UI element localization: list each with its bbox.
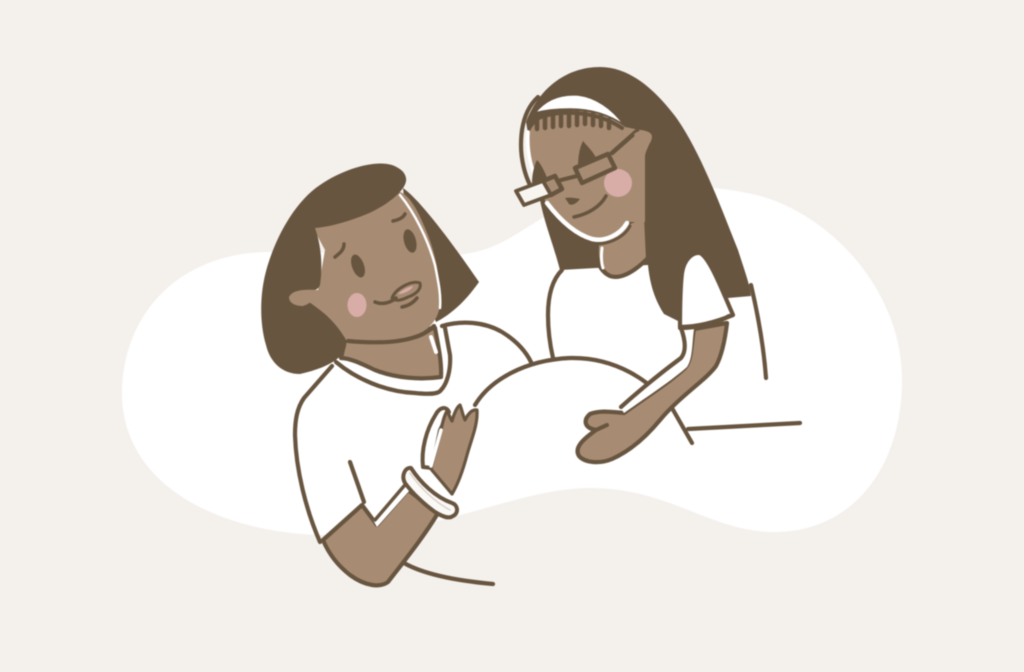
left arm sleeve white: [373, 485, 410, 527]
left arm upper line: [375, 486, 404, 520]
sleeve crease: [350, 462, 364, 502]
right woman chin highlight: [547, 203, 627, 240]
face highlight: [400, 195, 440, 308]
right woman back line: [751, 285, 766, 378]
arm cuff: [680, 316, 729, 328]
right woman cheek: [604, 169, 632, 197]
thumb split: [596, 425, 607, 430]
left woman mouth: [392, 282, 420, 300]
hand left edge highlight: [431, 430, 441, 466]
left woman front hair: [261, 164, 406, 374]
left woman back hair: [403, 188, 479, 322]
right woman neck: [597, 215, 648, 277]
left woman: [261, 164, 531, 585]
right woman face rim: [528, 132, 536, 178]
right woman arm: [578, 316, 729, 462]
left woman cheek: [348, 293, 366, 317]
white blob: [122, 187, 902, 535]
right woman face: [528, 111, 651, 239]
left hand outline: [423, 408, 449, 468]
left woman eyes: [348, 253, 368, 279]
right woman smile: [574, 196, 606, 217]
left woman eyebrows: [335, 214, 405, 257]
jaw line: [348, 326, 434, 342]
left lens frame: [543, 176, 562, 195]
arm skin: [578, 323, 727, 462]
headband: [535, 95, 624, 125]
smile lines: [375, 298, 417, 307]
left woman shirt shoulder: [442, 323, 531, 362]
right woman lap line: [688, 423, 800, 429]
right woman shirt outline: [548, 270, 562, 358]
right lens frame: [575, 154, 615, 183]
left woman shirt left: [295, 366, 332, 542]
mouth pink: [398, 286, 413, 294]
right woman chin shadow: [592, 226, 630, 244]
neck highlight: [431, 337, 436, 352]
bridge: [561, 176, 577, 180]
bracelet inner line: [410, 473, 450, 510]
right woman sleeve: [680, 253, 733, 327]
left woman neck: [341, 328, 441, 378]
lower body line: [404, 563, 493, 584]
right woman outer face line: [521, 97, 538, 185]
right woman nose: [565, 198, 580, 205]
right woman eyes: [532, 141, 597, 184]
left lens white: [516, 181, 551, 205]
left woman hand: [431, 405, 477, 494]
right woman long hair: [526, 67, 751, 322]
left woman arm: [323, 490, 438, 585]
arm white strip: [620, 328, 694, 413]
woman right: caregiver: [516, 67, 800, 429]
bracelet band: [403, 468, 457, 517]
bracelet: [403, 468, 457, 517]
left woman ear: [289, 290, 318, 306]
arm outer line: [621, 328, 685, 407]
left woman face: [289, 192, 440, 342]
temple arm: [612, 131, 637, 153]
fringe: [530, 112, 622, 129]
left woman collar: [336, 328, 450, 394]
right woman neck highlight: [601, 248, 603, 268]
right woman ear: [634, 131, 652, 150]
belly: [475, 358, 692, 443]
glasses: [516, 131, 637, 205]
